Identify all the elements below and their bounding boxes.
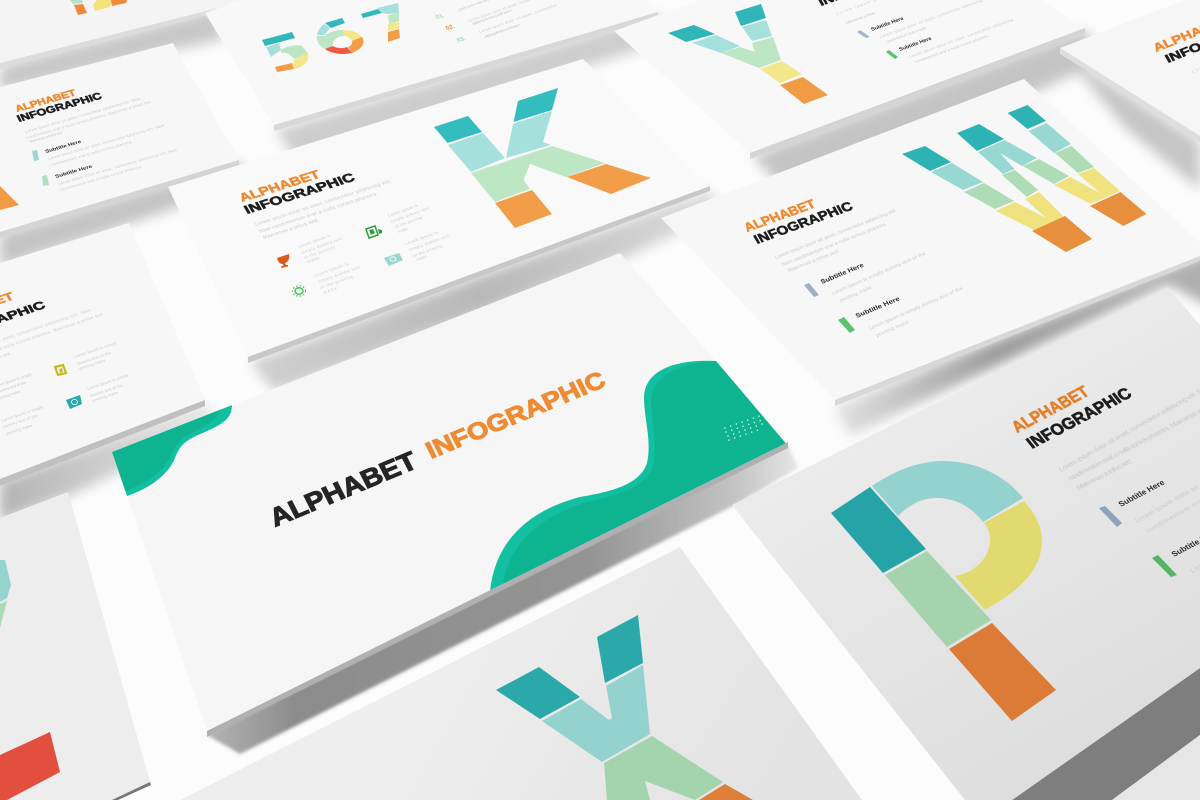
item: box icon: simply dummy text — [408, 233, 451, 252]
subtitle two: condimentum erat a nulla cursus pharetra. — [60, 165, 143, 192]
item: trophy: Lorem Ipsum is — [297, 233, 331, 249]
item: chart icon: simply dummy text — [389, 205, 431, 224]
heading: ALPHABET — [741, 196, 818, 235]
item: teal icon: Lorem Ipsum is simply — [86, 373, 129, 391]
numbered list: 03. — [456, 36, 467, 44]
card: top right partial — [1060, 0, 1200, 142]
subtitle one: Subtitle Here — [870, 16, 905, 33]
subtitle one: Subtitle Here — [44, 139, 83, 155]
title: alphabet: ALPHABET — [264, 445, 422, 532]
item: yellow icon — [55, 340, 117, 375]
numbered list: adipiscing elit. Nam condimentum — [483, 23, 521, 39]
subtitle two — [838, 286, 964, 339]
heading second line: INFOGRAPHIC — [751, 198, 856, 247]
item: yellow icon: dummy text of the — [76, 350, 112, 366]
item: teal icon: dummy text of the — [89, 382, 125, 398]
numbered list — [435, 0, 558, 44]
item: trophy — [277, 233, 344, 268]
body text: condimentum erat a nulla cursus pharetra. Maecenas a tellus sed — [25, 99, 152, 140]
item: trophy: simply dummy text — [300, 236, 344, 255]
subtitle two: Subtitle Here — [855, 296, 902, 320]
numbered list: 01. — [435, 13, 446, 21]
subtitle one — [857, 16, 905, 38]
card: top partial slide — [0, 0, 266, 69]
item: gear icon: make — [322, 286, 338, 295]
item: left text two: dummy text of the — [2, 413, 39, 429]
item: yellow icon: Lorem Ipsum is simply — [73, 340, 117, 359]
body text: Nam condimentum erat a nulla cursus pharetra. — [258, 191, 379, 235]
subtitle one: Lorem ipsum dolor sit amet, consectetur adipiscing elit. Nam — [48, 124, 165, 161]
subtitle one — [1099, 454, 1200, 535]
heading second line: INFOGRAPHIC — [242, 171, 357, 217]
subtitle two: Lorem Ipsum is simply dummy text of the — [868, 286, 964, 332]
item: gear icon: Lorem Ipsum is — [313, 261, 349, 278]
body text: Maecenas a tellus sed — [1076, 458, 1133, 492]
subtitle one: Subtitle Here — [820, 262, 866, 286]
subtitle two: Lorem ipsum dolor sit amet, consectetur adipiscing elit. Nam — [58, 148, 178, 186]
item: chart icon: make — [397, 226, 410, 234]
heading second line: INFOGRAPHIC — [1023, 384, 1135, 452]
card: letter L partial — [0, 492, 151, 800]
body text: Lorem ipsum dolor sit amet, consectetur adipiscing elit. — [774, 208, 898, 261]
heading second line: INFOGRAPHIC — [15, 91, 104, 125]
body text — [835, 0, 1014, 64]
digit 7 — [361, 3, 400, 42]
title: infographic: INFOGRAPHIC — [422, 367, 610, 464]
item: left text two — [0, 404, 44, 436]
body text: Lorem ipsum dolor sit amet, consectetur adipiscing — [908, 18, 1014, 59]
numbered list: adipiscing elit. Nam condimentum — [471, 9, 513, 26]
item: gear icon — [292, 261, 362, 296]
item: left text one — [0, 372, 32, 401]
item: chart icon: Lorem Ipsum is — [387, 203, 419, 218]
body text: Lorem ipsum dolor sit amet, consectetur adipiscing elit, — [254, 179, 393, 228]
body text: condimentum erat a nulla cursus pharetra. — [914, 34, 990, 64]
item: gear icon: simply dummy text — [317, 264, 362, 284]
item: yellow icon: printing make — [78, 358, 107, 371]
body text: Nam condimentum erat a nulla cursus pharetra. — [781, 221, 888, 268]
numbered list: Lorem ipsum dolor sit amet, consectetur — [478, 3, 558, 34]
card: letter K — [168, 59, 710, 363]
card: bottom right partial — [1112, 735, 1200, 800]
card: numbers 567 — [205, 0, 658, 131]
item: box icon: of the printing — [412, 243, 443, 258]
subtitle one — [804, 251, 927, 304]
numbered list: 02. — [445, 24, 456, 32]
numbers 1 and 2 fragment — [70, 0, 127, 15]
heading: ALPHABET — [237, 168, 323, 205]
card: title slide — [112, 253, 788, 737]
body text: a nulla cursus pharetra. Maecenas a tellus sed. — [0, 311, 105, 351]
item: trophy: of the printing — [303, 245, 336, 260]
subtitle one: Subtitle Here — [1117, 478, 1167, 509]
subtitle one: Lorem Ipsum is simply dummy text of the — [831, 251, 927, 297]
letter K — [434, 88, 651, 228]
digit 5 — [262, 32, 308, 72]
wave top left — [112, 405, 232, 496]
body text: Maecenas a tellus — [845, 11, 876, 25]
digit 6 — [317, 18, 364, 54]
subtitle two: Subtitle Here — [54, 164, 94, 180]
subtitle two: printing make — [875, 320, 910, 339]
card: letter P — [732, 287, 1200, 800]
wave bottom right — [490, 361, 788, 592]
item: box icon: Lorem Ipsum is — [404, 230, 438, 246]
item: trophy: make — [306, 255, 321, 264]
subtitle two: Subtitle Here — [898, 36, 933, 53]
card: letter X — [180, 547, 862, 800]
body text: condimentum erat a nulla — [885, 26, 928, 44]
subtitle two — [1152, 528, 1200, 577]
dot grid — [725, 413, 768, 440]
item: teal icon: printing make — [91, 390, 120, 403]
letter fragment — [0, 186, 19, 210]
item: box icon: make — [415, 254, 429, 262]
letter X — [496, 615, 753, 800]
letter P — [831, 461, 1056, 721]
heading: ALPHABET — [13, 88, 78, 115]
card: left icons — [0, 223, 205, 486]
subtitle two — [886, 36, 933, 59]
body text: Maecenas a tellus sed — [28, 130, 63, 144]
card: top left subtitles — [0, 43, 239, 238]
letter W — [902, 105, 1146, 252]
card: letter Y — [614, 0, 1085, 159]
subtitle one: printing make — [839, 285, 873, 304]
item: box icon — [384, 230, 451, 266]
item: gear icon: of the printing — [319, 274, 353, 290]
item: left text two: Lorem Ipsum is simply — [0, 404, 44, 423]
card: letter W — [661, 79, 1200, 406]
item: teal icon — [66, 373, 129, 409]
item: left text two: printing make — [5, 423, 34, 436]
body text: Lorem ipsum dolor sit amet, consectetur adipiscing elit. Nam — [24, 96, 141, 134]
letter fragments — [0, 560, 60, 800]
subtitle one: condimentum erat a nulla cursus pharetra. — [51, 140, 133, 167]
item: chart icon: of the printing — [394, 215, 423, 229]
letter Y — [668, 4, 828, 104]
item: chart icon — [366, 203, 431, 238]
body text: Maecenas a tellus sed. — [262, 218, 320, 241]
heading: ALPHABET — [1008, 382, 1093, 436]
body text: Maecenas a tellus sed. — [787, 249, 841, 274]
